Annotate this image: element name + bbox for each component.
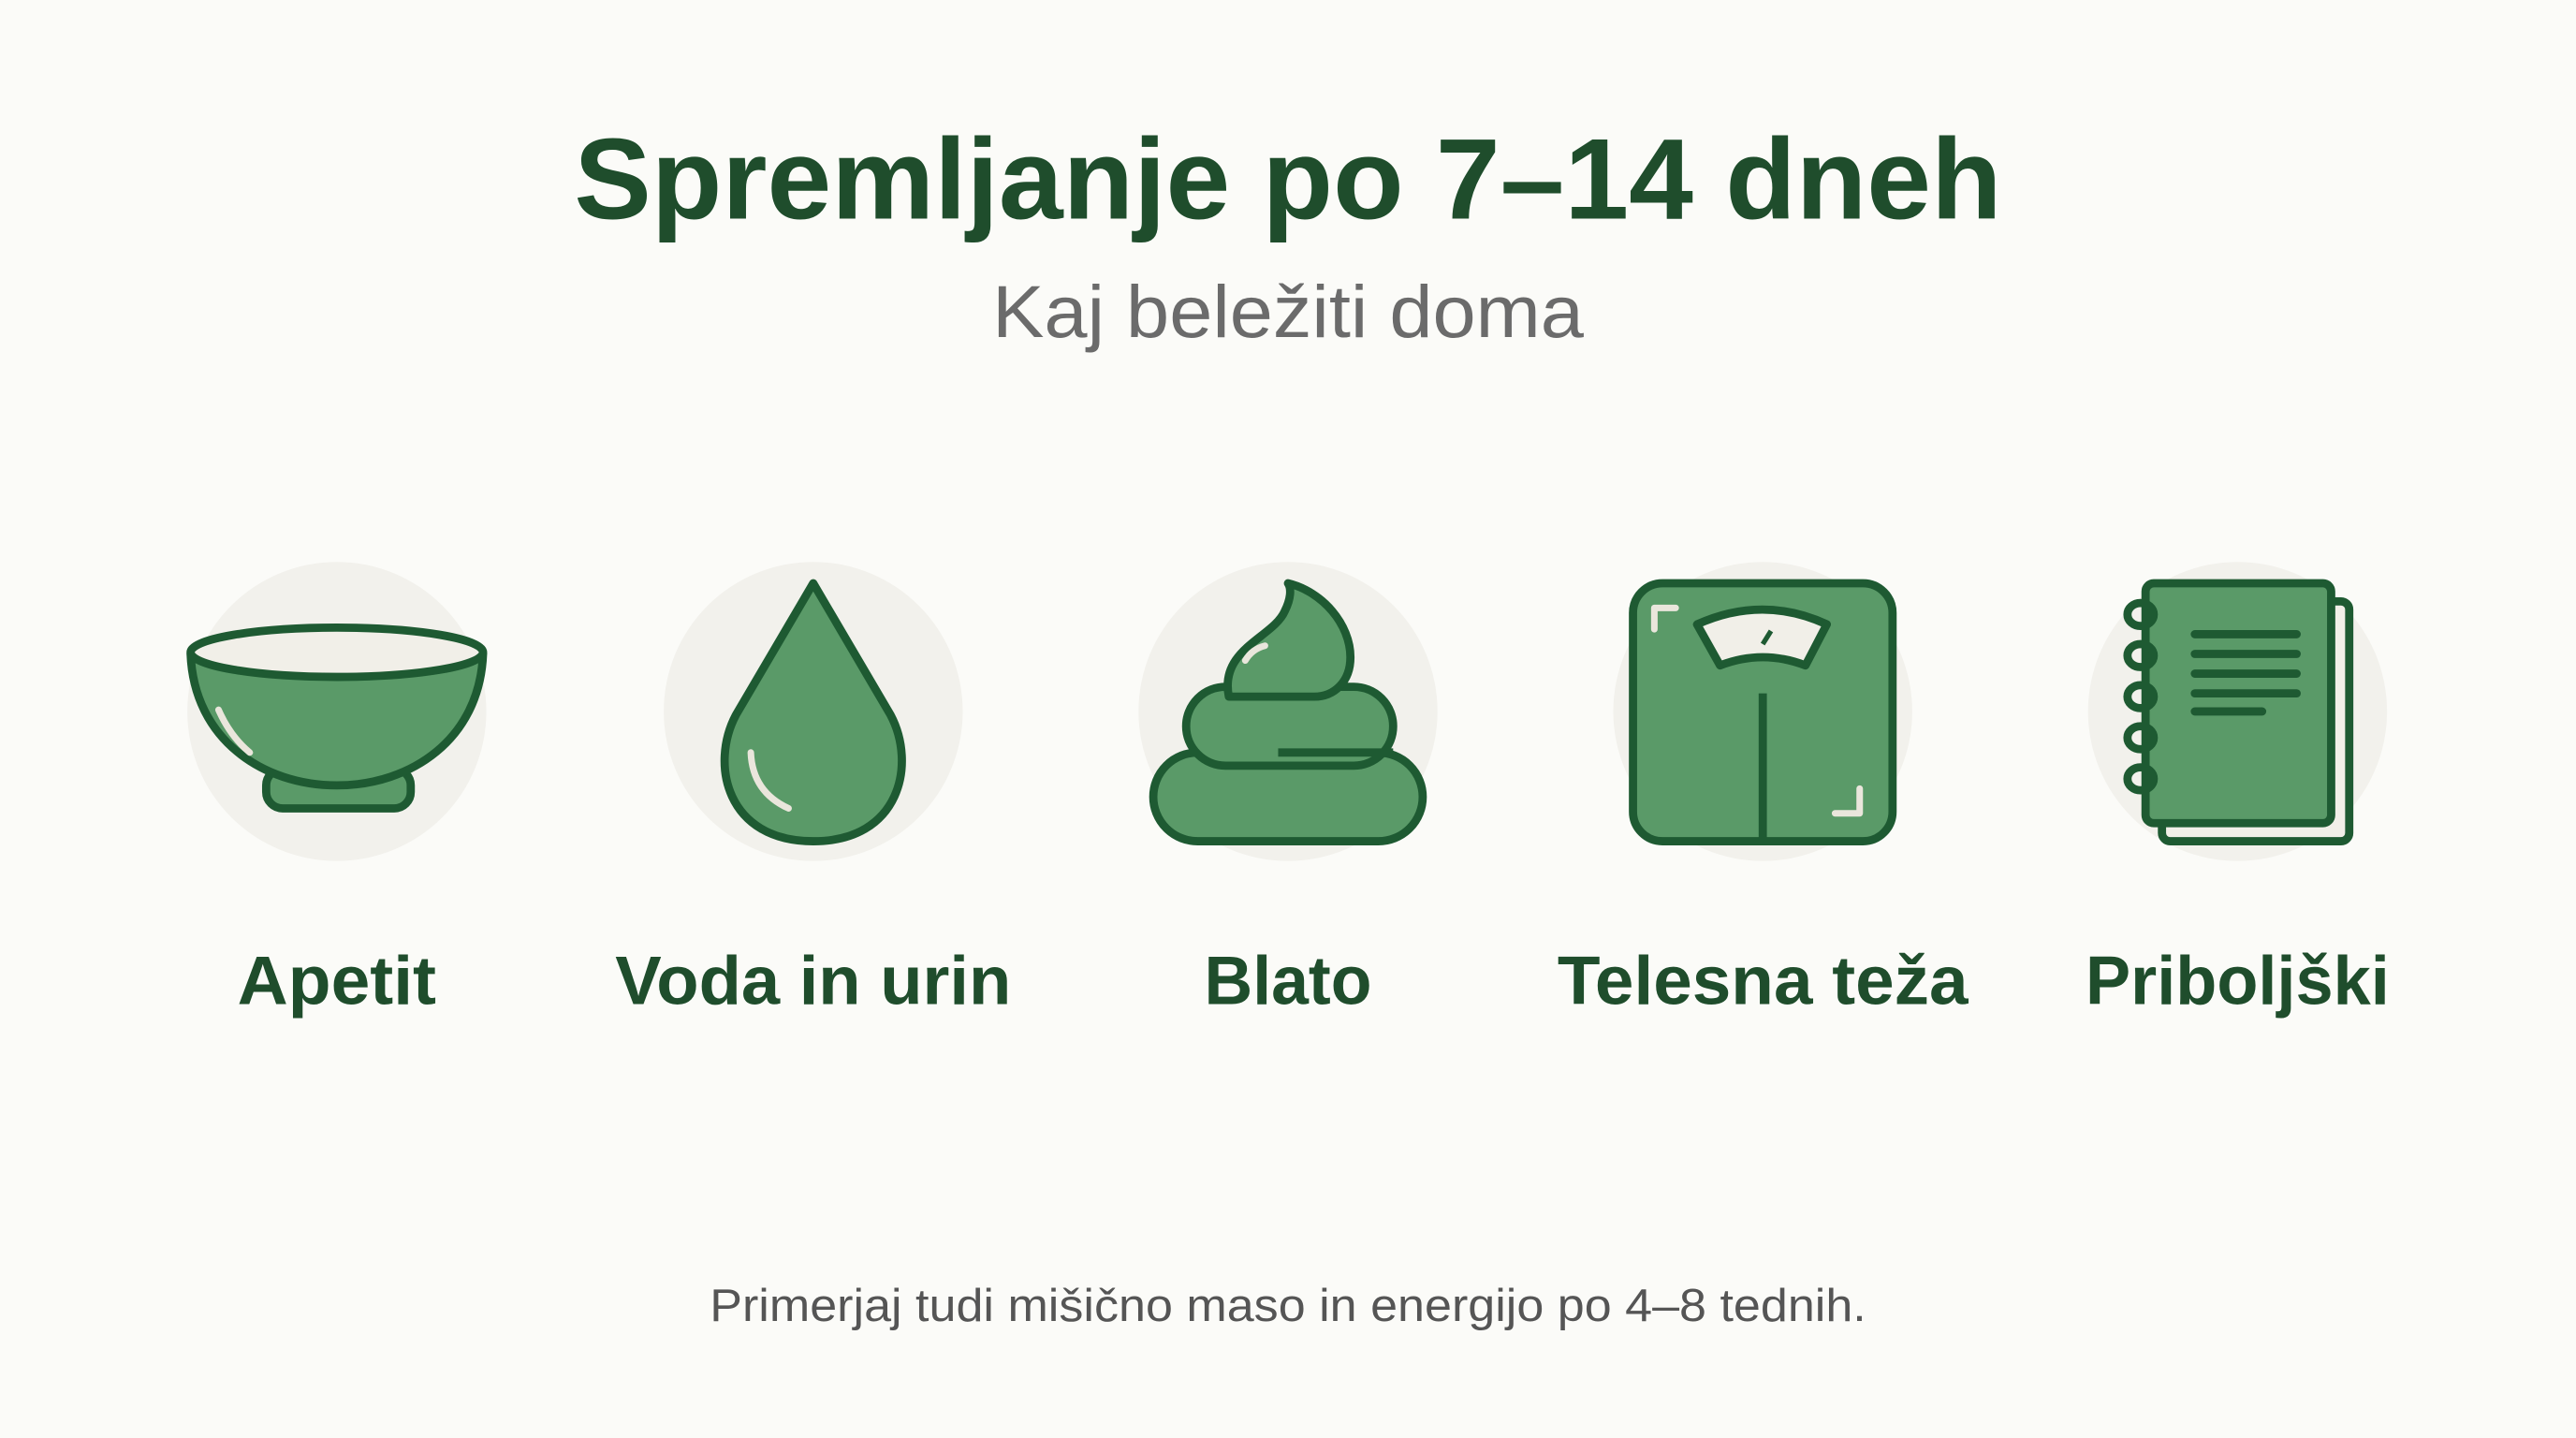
icon: bowl bbox=[187, 562, 487, 861]
icon: scale bbox=[1613, 562, 1912, 861]
footer note: Primerjaj tudi mišično maso in energijo po 4–8 tednih. bbox=[710, 1281, 1866, 1331]
title: Spremljanje po 7–14 dneh bbox=[574, 115, 2002, 243]
icon: notebook bbox=[2088, 562, 2387, 861]
label: Priboljški: Priboljški bbox=[2086, 941, 2390, 1019]
label: Telesna teža: Telesna teža bbox=[1558, 941, 1969, 1019]
icon: water drop bbox=[664, 562, 963, 861]
subtitle: Kaj beležiti doma bbox=[992, 271, 1584, 353]
label: Blato: Blato bbox=[1204, 941, 1372, 1019]
icon: stool bbox=[1138, 562, 1438, 861]
label: Apetit: Apetit bbox=[238, 941, 436, 1019]
label: Voda in urin: Voda in urin bbox=[615, 941, 1011, 1019]
